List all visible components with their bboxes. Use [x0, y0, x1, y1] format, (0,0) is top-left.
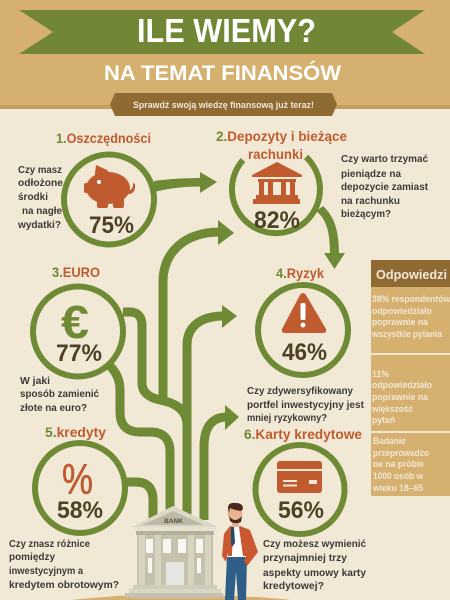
answer: survey note: Badanie [373, 436, 406, 446]
question: Czy masz [18, 165, 62, 176]
answer: 11 percent: większość [371, 404, 413, 414]
panel: answers [371, 260, 450, 496]
ring [33, 286, 123, 376]
question: pieniądze na [341, 169, 401, 180]
answer: 11 percent: 11% [372, 369, 389, 379]
panel: 1 savings [17, 130, 154, 244]
icon: businessman [222, 503, 258, 600]
percentage: 56% [278, 497, 324, 524]
ring [232, 157, 320, 233]
answer: survey note: przeprowadzo [373, 448, 429, 458]
question: przynajmniej trzy [263, 553, 347, 564]
icon: bank building [125, 506, 223, 598]
question: aspekty umowy karty [263, 568, 366, 579]
question [263, 539, 366, 592]
question: W jaki [20, 376, 50, 387]
ring [64, 154, 154, 244]
pipe: credits to bank [126, 482, 153, 520]
ring [258, 285, 348, 375]
heading [216, 128, 347, 162]
ring [256, 445, 344, 534]
panel: 2 deposits [216, 128, 429, 234]
answer: survey note [372, 436, 429, 493]
panel: 5 credits [9, 424, 125, 591]
answer: 38 percent [371, 294, 450, 339]
ground [70, 594, 290, 600]
question: portfel inwestycyjny jest [247, 400, 365, 411]
heading: 5.kredyty [45, 424, 106, 440]
question [20, 376, 99, 414]
answer: survey note: ne na próbie [373, 459, 424, 469]
question: złote na euro? [20, 403, 87, 414]
question: kredytowej? [263, 581, 324, 592]
heading: 4.Ryzyk [276, 265, 324, 281]
question: inwestycyjnym a [9, 566, 83, 577]
panel: 6 credit cards [244, 426, 366, 592]
heading: 3.EURO [52, 264, 100, 280]
subtitle: NA TEMAT FINANSÓW [104, 61, 341, 85]
title ribbon: ILE WIEMY? [137, 12, 316, 49]
percentage: 82% [254, 207, 300, 234]
icon: euro sign: € [61, 296, 89, 348]
answers heading [371, 260, 450, 287]
answer: 38 percent: wszystkie pytania [371, 329, 443, 339]
tagline badge: Sprawdź swoją wiedzę finansową już teraz! [133, 100, 314, 110]
arrow: bank to risk [187, 305, 237, 515]
question [17, 165, 63, 231]
percentage: 46% [282, 339, 327, 366]
question: Czy możesz wymienić [263, 539, 366, 550]
answer: survey note: wieku 18–65 [372, 483, 423, 493]
answer: 11 percent: odpowiedziało [372, 380, 432, 390]
panel: 3 euro [20, 264, 123, 414]
percentage: 75% [89, 212, 134, 239]
question: sposób zamienić [20, 389, 99, 400]
icon: warning triangle [282, 293, 326, 333]
question [341, 154, 429, 220]
answer: 38 percent: poprawnie na [372, 317, 429, 327]
answers heading: Odpowiedzi [376, 267, 447, 282]
answer: survey note: 1000 osób w [373, 471, 424, 481]
question: na nagłe [22, 206, 62, 217]
header band [0, 0, 450, 109]
connector pipes and arrows [110, 172, 345, 520]
pipe: euro to bank [123, 312, 187, 425]
icon: bank building: BANK [164, 519, 184, 525]
question: Czy warto trzymać [341, 154, 428, 165]
question: Czy znasz różnice [9, 539, 90, 550]
answer: 11 percent: poprawnie na [372, 392, 429, 402]
heading: 2.Depozyty i bieżące [216, 128, 347, 144]
icon: piggy bank [84, 165, 135, 208]
panel: 4 risk [247, 265, 365, 424]
icon: percent sign: % [62, 456, 93, 504]
title ribbon [19, 10, 425, 54]
question: wydatki? [17, 220, 61, 231]
arrow: deposits to risk [316, 206, 345, 269]
question: kredytem obrotowym? [9, 580, 119, 591]
question: pomiędzy [9, 552, 55, 563]
tagline badge [110, 93, 337, 116]
heading: 1.Oszczędności [56, 130, 151, 146]
arrow: savings to deposits [154, 172, 217, 193]
icon: bank [252, 162, 302, 204]
pipe: euro lower to bank [110, 366, 170, 515]
ring [35, 443, 125, 533]
percentage: 77% [56, 340, 102, 367]
icon: credit card [277, 461, 322, 493]
question: Czy zdywersyfikowany [247, 386, 353, 397]
answer: 11 percent [371, 369, 432, 425]
heading: 6.Karty kredytowe [244, 426, 362, 442]
arrow: bank to cards [204, 405, 239, 520]
answer: 11 percent: pytań [372, 415, 395, 425]
question: bieżącym? [341, 209, 391, 220]
percentage: 58% [57, 497, 103, 524]
answer: 38 percent: odpowiedziało [372, 306, 432, 316]
question [247, 386, 365, 424]
question [9, 539, 119, 591]
question: depozycie zamiast [341, 182, 429, 193]
arrow: bank to deposits [163, 220, 234, 402]
question: odłożone [18, 178, 63, 189]
question: mniej ryzykowny? [247, 413, 327, 424]
heading: rachunki [248, 146, 303, 162]
question: na rachunku [341, 196, 400, 207]
question: środki [18, 192, 48, 203]
